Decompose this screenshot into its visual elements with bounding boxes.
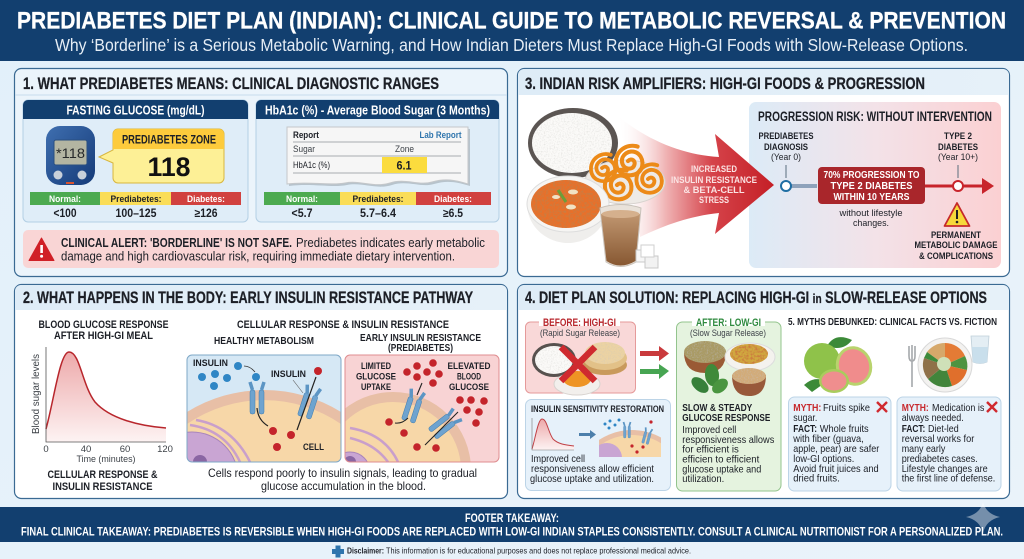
card: after low-GI: SLOW & STEADY xyxy=(682,402,752,414)
chart: blood glucose response: Time (minutes) xyxy=(76,454,136,465)
milestone: diagnosis xyxy=(758,131,817,191)
lab report xyxy=(287,127,470,187)
caption: cell response xyxy=(208,466,477,493)
card: after low-GI: GLUCOSE RESPONSE xyxy=(682,412,770,424)
card: myth fruits: Avoid fruit juices and xyxy=(793,463,879,475)
chart: blood glucose response: 60 xyxy=(120,444,130,455)
card: myth fruits: low-GI options. xyxy=(793,453,854,465)
caption: cell response: glucose accumulation in the blood. xyxy=(261,479,426,493)
mini cell xyxy=(599,418,661,457)
card: after low-GI: (Slow Sugar Release) xyxy=(690,328,766,339)
arrow: improvement xyxy=(579,430,596,439)
icon: warning triangle xyxy=(944,203,970,226)
heading 3: 3. INDIAN RISK AMPLIFIERS: HIGH-GI FOODS & PROGRESSION xyxy=(525,75,925,93)
arrow: foods to insulin resistance: INSULIN RESISTANCE xyxy=(671,175,757,185)
illustration: carrot halwa bowl xyxy=(527,176,609,243)
card: before high-GI: (Rapid Sugar Release) xyxy=(540,328,620,339)
panel: progression risk: changes. xyxy=(853,218,889,229)
panel: progression risk: PERMANENT xyxy=(931,230,981,240)
lab report: 6.1 xyxy=(396,158,412,172)
chart: blood glucose response: BLOOD GLUCOSE RESPONSE xyxy=(38,319,168,331)
illustration: rice bowl xyxy=(528,108,618,178)
card: before high-GI xyxy=(526,317,636,395)
icon: glucose meter xyxy=(46,126,95,185)
chart: blood glucose response: 40 xyxy=(81,444,91,455)
card: fasting glucose xyxy=(23,100,248,222)
clinical alert: CLINICAL ALERT: 'BORDERLINE' IS NOT SAFE. xyxy=(61,236,292,250)
milestone: diagnosis: DIAGNOSIS xyxy=(764,142,808,152)
illustration: high-GI foods xyxy=(532,342,627,395)
panel: progression risk: without lifestyle xyxy=(839,208,902,219)
heading: cellular response: CELLULAR RESPONSE & INSULIN RESISTANCE xyxy=(237,319,449,331)
clinical alert: damage and high cardiovascular risk, requiring immediate dietary intervention. xyxy=(61,250,455,264)
icon: cross xyxy=(877,402,887,412)
milestone: diagnosis: (Year 0) xyxy=(771,152,801,162)
heading: healthy metabolism: HEALTHY METABOLISM xyxy=(214,336,314,347)
heading: early insulin resistance xyxy=(360,333,481,354)
panel 2: what happens in the body xyxy=(14,284,508,500)
card: myth fruits: FACT: xyxy=(793,423,817,435)
card: after low-GI: glucose uptake and xyxy=(682,464,761,476)
panel: progression risk: METABOLIC DAMAGE xyxy=(914,240,998,250)
panel: progression risk: & COMPLICATIONS xyxy=(919,251,993,261)
card: myth fruits xyxy=(788,397,891,491)
card: before high-GI: BEFORE: HIGH-GI xyxy=(543,317,616,329)
chart: blood glucose response: 120 xyxy=(157,444,173,455)
diagram: healthy cell: INSULIN xyxy=(193,358,228,369)
caption: cellular response xyxy=(48,469,158,493)
milestone: type 2 diabetes xyxy=(925,131,994,194)
diagram: healthy cell xyxy=(186,354,342,462)
card: after low-GI xyxy=(676,317,781,491)
card: myth medication: Medication is xyxy=(932,402,984,414)
illustration: balanced plate xyxy=(909,336,989,392)
icon: medical cross xyxy=(332,546,344,558)
illustration: low-GI foods xyxy=(684,341,775,396)
milestone: diagnosis: PREDIABETES xyxy=(758,131,814,141)
disclaimer xyxy=(332,546,691,558)
card: insulin sensitivity restoration: Improved cell xyxy=(531,453,585,465)
card: myth medication: FACT: xyxy=(902,423,925,435)
icon: cross xyxy=(987,402,997,412)
diagram: healthy cell: INSULIN xyxy=(271,369,306,380)
panel 1: what prediabetes means xyxy=(14,68,508,276)
milestone: type 2 diabetes: DIABETES xyxy=(938,142,978,152)
heading 4: 4. DIET PLAN SOLUTION: REPLACING HIGH-GI in SLOW-RELEASE OPTIONS xyxy=(525,289,987,307)
lab report: Report xyxy=(293,130,320,141)
chart: blood glucose response: AFTER HIGH-GI MEAL xyxy=(54,330,153,342)
card: after low-GI: utilization. xyxy=(682,473,724,485)
disclaimer: This information is for educational purposes and does not replace professional medical advice. xyxy=(386,546,691,556)
card: myth medication: Lifestyle changes are xyxy=(902,463,988,475)
card: myth medication: MYTH: xyxy=(902,402,929,414)
card: myth medication: Diet-led xyxy=(928,423,959,435)
arrow: foods to insulin resistance: INCREASED xyxy=(691,164,737,174)
scale: fasting glucose ranges: Prediabetes: xyxy=(110,194,162,205)
card: myth fruits: Fruits spike xyxy=(823,402,870,414)
footer takeaway band: FOOTER TAKEAWAY: xyxy=(465,513,559,525)
card: myth medication: reversal works for xyxy=(902,433,975,445)
card: myth medication: always needed. xyxy=(902,412,964,424)
chart: blood glucose response: 0 xyxy=(43,444,49,455)
scale: fasting glucose ranges xyxy=(30,192,241,220)
card: myth fruits: with fiber (guava, xyxy=(792,433,864,445)
decorative star xyxy=(966,502,1000,533)
scale: HbA1c ranges: Diabetes: xyxy=(434,194,472,205)
scale: fasting glucose ranges: Diabetes: xyxy=(187,194,225,205)
diagram: healthy cell: CELL xyxy=(303,442,324,453)
card: myth medication: the first line of defense. xyxy=(902,472,995,484)
chart: blood glucose response xyxy=(30,319,173,465)
card: after low-GI: efficien to efficient xyxy=(682,454,759,466)
scale: fasting glucose ranges: Normal: xyxy=(49,194,81,205)
card: insulin sensitivity restoration xyxy=(525,399,671,491)
illustration: jalebi plate xyxy=(585,146,665,204)
scale: HbA1c ranges: 5.7–6.4 xyxy=(360,208,397,220)
card: after low-GI: for efficient is xyxy=(682,444,739,456)
callout: prediabetes zone xyxy=(99,129,224,183)
diagram: insulin resistant cell: BLOOD xyxy=(457,372,481,382)
mini chart xyxy=(532,418,574,450)
clinical alert xyxy=(23,230,499,268)
arrow: foods to insulin resistance: STRESS xyxy=(699,195,729,205)
heading 1: 1. WHAT PREDIABETES MEANS: CLINICAL DIAGNOSTIC RANGES xyxy=(23,75,439,93)
card: myth fruits: sugar. xyxy=(793,412,817,424)
card: insulin sensitivity restoration: responsiveness allow efficient xyxy=(531,463,654,475)
heading: early insulin resistance: EARLY INSULIN RESISTANCE xyxy=(360,333,481,344)
diagram: insulin resistant cell: ELEVATED xyxy=(448,361,491,372)
icon: glucose meter: *118 xyxy=(56,145,85,161)
panel 3: Indian risk amplifiers xyxy=(518,68,1010,276)
card: myth fruits: apple, pear) are safer xyxy=(793,443,880,455)
scale: HbA1c ranges: Prediabetes: xyxy=(352,194,404,205)
diagram: insulin resistant cell: GLUCOSE xyxy=(356,372,396,382)
illustration: guava xyxy=(804,337,878,393)
panel 4: diet plan solution xyxy=(516,284,1010,500)
scale: HbA1c ranges: Normal: xyxy=(286,194,318,205)
scale: fasting glucose ranges: ≥126 xyxy=(194,208,218,220)
diagram: insulin resistant cell: GLUCOSE xyxy=(449,382,489,393)
arrows: swap xyxy=(640,346,669,379)
scale: HbA1c ranges xyxy=(264,192,491,220)
header band xyxy=(0,0,1024,61)
caption: cellular response: INSULIN RESISTANCE xyxy=(52,481,152,493)
diagram: insulin resistant cell xyxy=(344,354,500,462)
card: insulin sensitivity restoration: glucose uptake and utilization. xyxy=(530,473,654,485)
diagram: insulin resistant cell: LIMITED xyxy=(361,361,391,372)
card: myth medication: many early xyxy=(902,443,946,455)
callout: 70 percent progression: WITHIN 10 YEARS xyxy=(834,192,910,203)
card: insulin sensitivity restoration: INSULIN SENSITIVITY RESTORATION xyxy=(531,404,664,415)
callout: 70 percent progression: 70% PROGRESSION TO xyxy=(824,170,920,181)
scale: HbA1c ranges: ≥6.5 xyxy=(443,208,464,220)
scale: HbA1c ranges: <5.7 xyxy=(292,208,312,220)
lab report: Zone xyxy=(395,144,414,154)
card: myth fruits: MYTH: xyxy=(793,402,821,414)
card: HbA1c xyxy=(256,100,499,222)
panel: progression risk xyxy=(749,102,1001,268)
caption: cellular response: CELLULAR RESPONSE & xyxy=(48,469,158,481)
milestone: type 2 diabetes: (Year 10+) xyxy=(938,152,978,162)
card: fasting glucose: FASTING GLUCOSE (mg/dL) xyxy=(66,104,204,118)
card: after low-GI: responsiveness allows xyxy=(682,434,774,446)
clinical alert: Prediabetes indicates early metabolic xyxy=(296,236,485,250)
scale: fasting glucose ranges: <100 xyxy=(54,208,76,220)
callout: 70 percent progression: TYPE 2 DIABETES xyxy=(830,181,913,192)
illustration: chai glass and sugar xyxy=(600,204,658,268)
callout: 70 percent progression xyxy=(818,167,925,204)
arrow: foods to insulin resistance xyxy=(619,117,774,237)
arrow: foods to insulin resistance: & BETA-CELL xyxy=(684,185,745,195)
lab report: Sugar xyxy=(293,144,315,154)
lab report: HbA1c (%) xyxy=(293,160,330,170)
milestone: type 2 diabetes: TYPE 2 xyxy=(944,131,972,141)
icon: red cross xyxy=(561,347,595,381)
heading 2: 2. WHAT HAPPENS IN THE BODY: EARLY INSULIN RESISTANCE PATHWAY xyxy=(23,289,473,307)
card: myth fruits: Whole fruits xyxy=(820,423,869,435)
disclaimer: Disclaimer: xyxy=(347,546,384,556)
lab report: Lab Report xyxy=(420,130,462,141)
card: myth medication xyxy=(897,397,1001,491)
heading: early insulin resistance: (PREDIABETES) xyxy=(388,343,453,354)
card: after low-GI: Improved cell xyxy=(682,424,736,436)
diagram: insulin resistant cell: UPTAKE xyxy=(361,382,391,393)
icon: alert triangle xyxy=(29,238,54,260)
caption: cell response: Cells respond poorly to insulin signals, leading to gradual xyxy=(208,466,477,480)
callout: prediabetes zone: PREDIABETES ZONE xyxy=(122,134,216,146)
callout: prediabetes zone: 118 xyxy=(148,152,190,182)
card: myth fruits: dried fruits. xyxy=(793,472,840,484)
card: HbA1c: HbA1c (%) - Average Blood Sugar (3 Months) xyxy=(265,104,490,118)
footer takeaway band xyxy=(0,502,1024,542)
scale: fasting glucose ranges: 100–125 xyxy=(116,208,157,220)
card: myth medication: prediabetes cases. xyxy=(902,453,978,465)
card: after low-GI: AFTER: LOW-GI xyxy=(696,317,761,329)
chart: blood glucose response: Blood sugar levels xyxy=(30,354,42,434)
